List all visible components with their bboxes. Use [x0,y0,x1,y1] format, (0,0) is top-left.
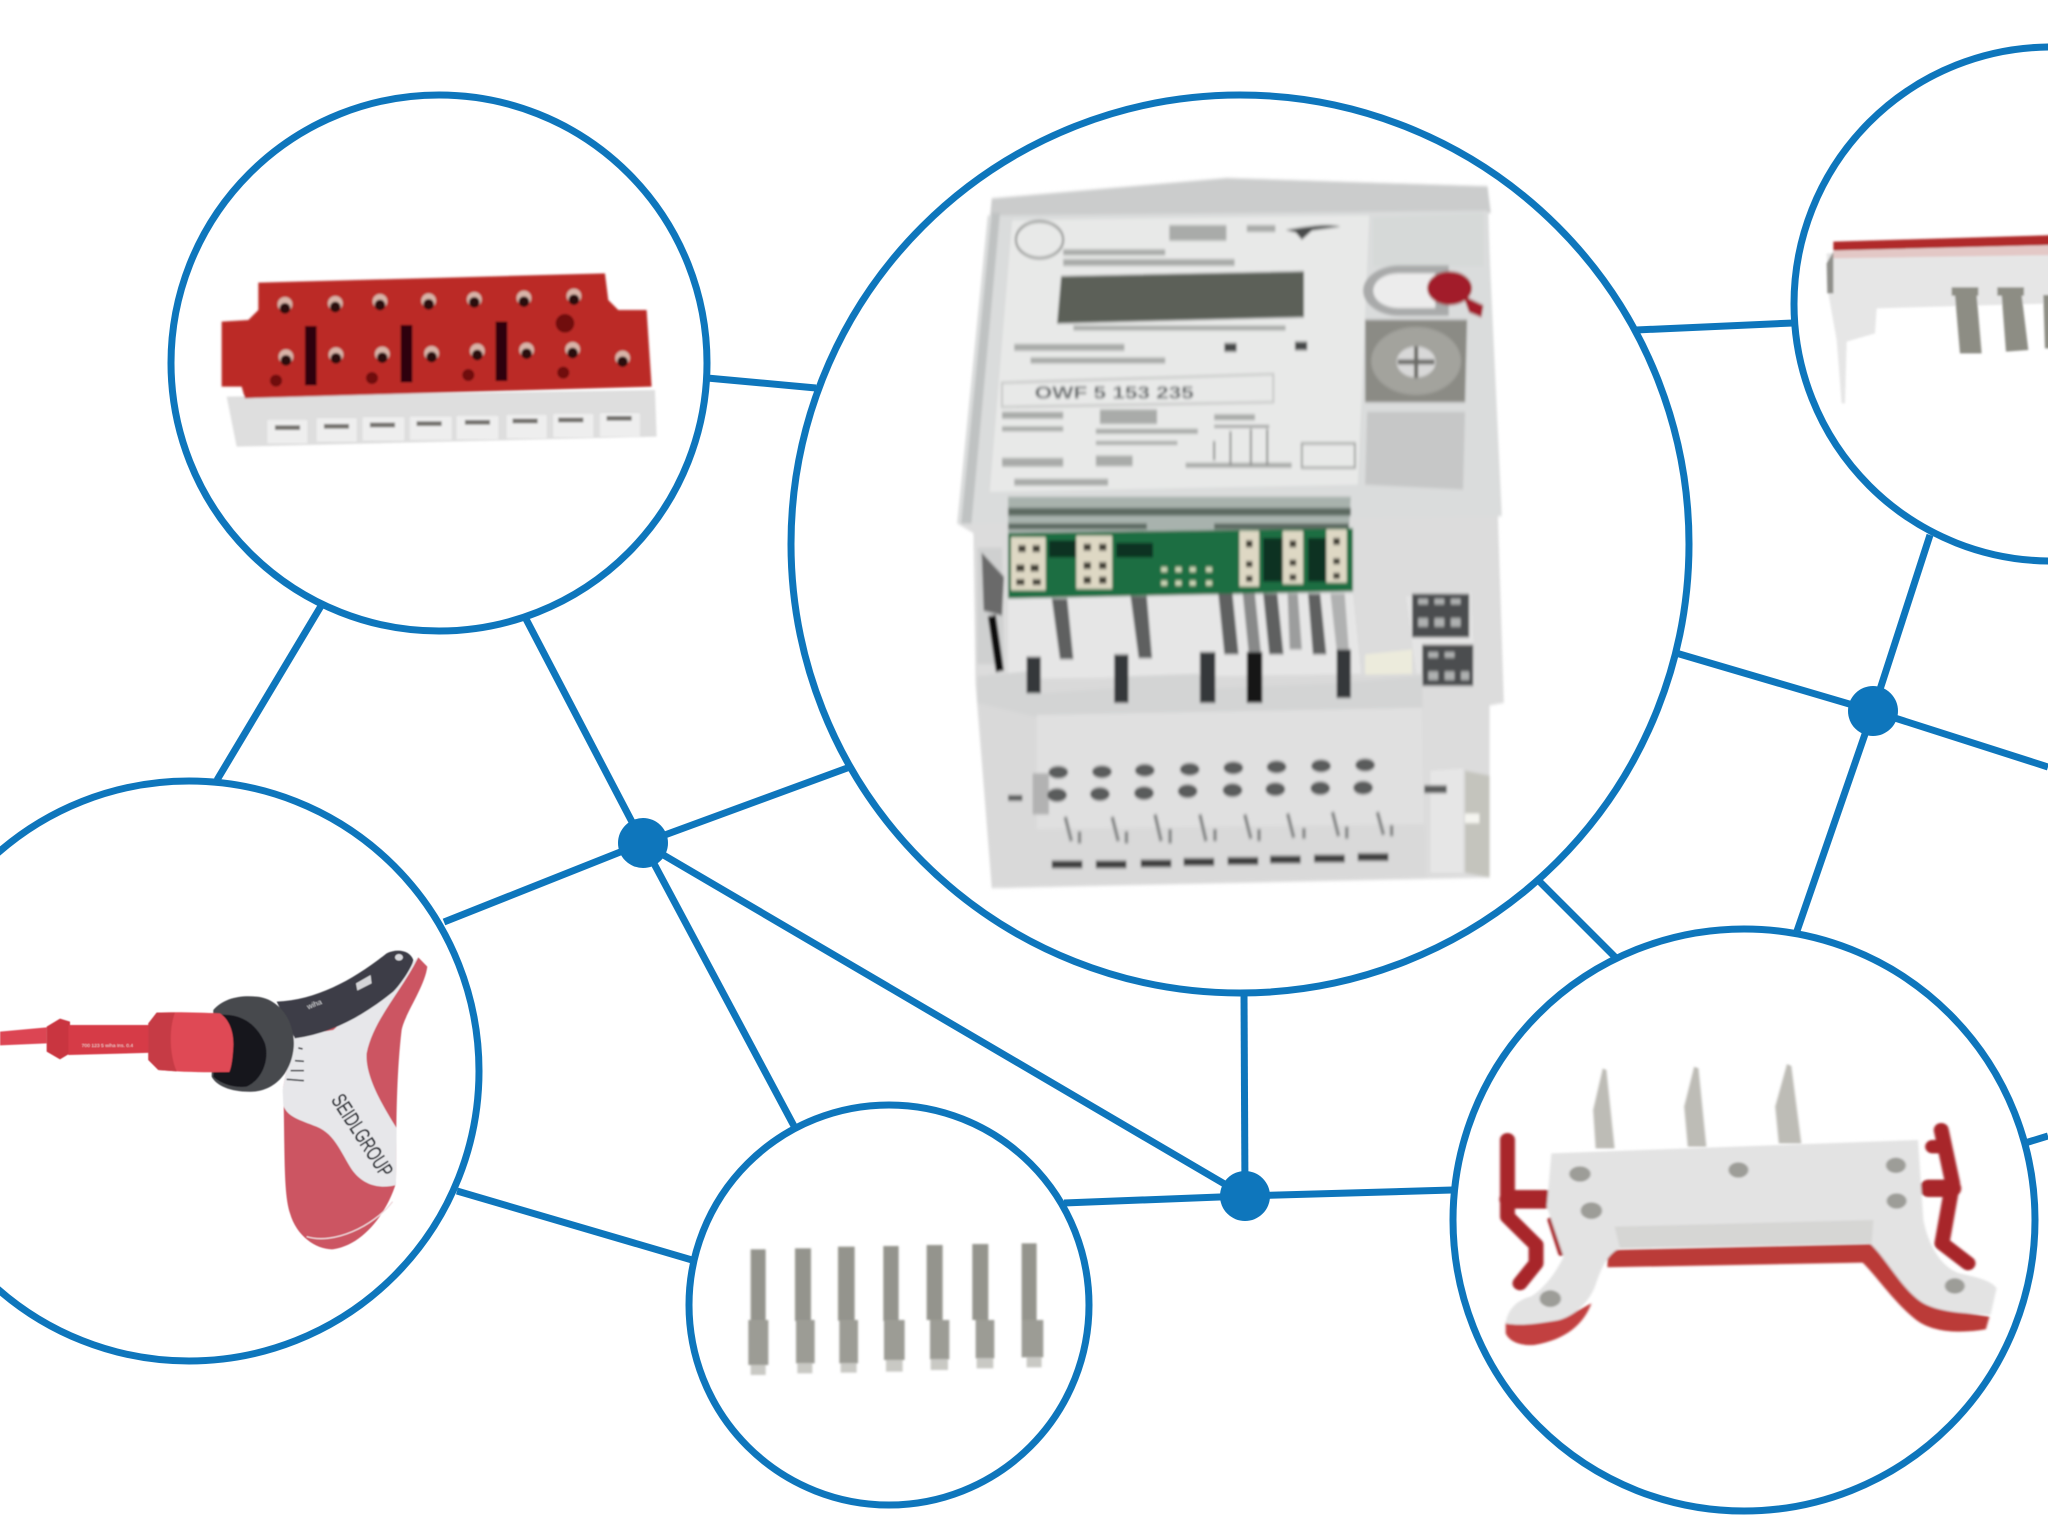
panel: electricity meter [791,95,1689,993]
panel: metal pins [689,1105,1089,1505]
junction node: right [1848,686,1898,736]
panel: red and white bridge connector [1453,929,2035,1511]
icon: bridge connector [1506,1064,1997,1345]
label: meter serial number: OWF 5 153 235 [1035,383,1194,403]
panel: jumper bar, cropped at right edge [1794,47,2048,561]
icon: red and white jumper bar [1827,235,2048,403]
label: handle brand: wiha [305,997,324,1012]
icon: electricity meter [957,178,1504,888]
label: bit markings: 700 123 5 wiha Ins. 0.4 [82,1043,133,1049]
panel: terminal block [171,95,707,631]
icon: seven metal pins [748,1243,1043,1375]
icon: red terminal block [222,273,657,447]
icon: torque screwdriver [0,951,427,1249]
panel: torque screwdriver [0,781,479,1361]
junction node: left [618,818,668,868]
junction node: bottom [1220,1171,1270,1221]
connecting lines [217,323,2048,1260]
label: SEIDLGROUP: SEIDLGROUP [326,1090,398,1182]
